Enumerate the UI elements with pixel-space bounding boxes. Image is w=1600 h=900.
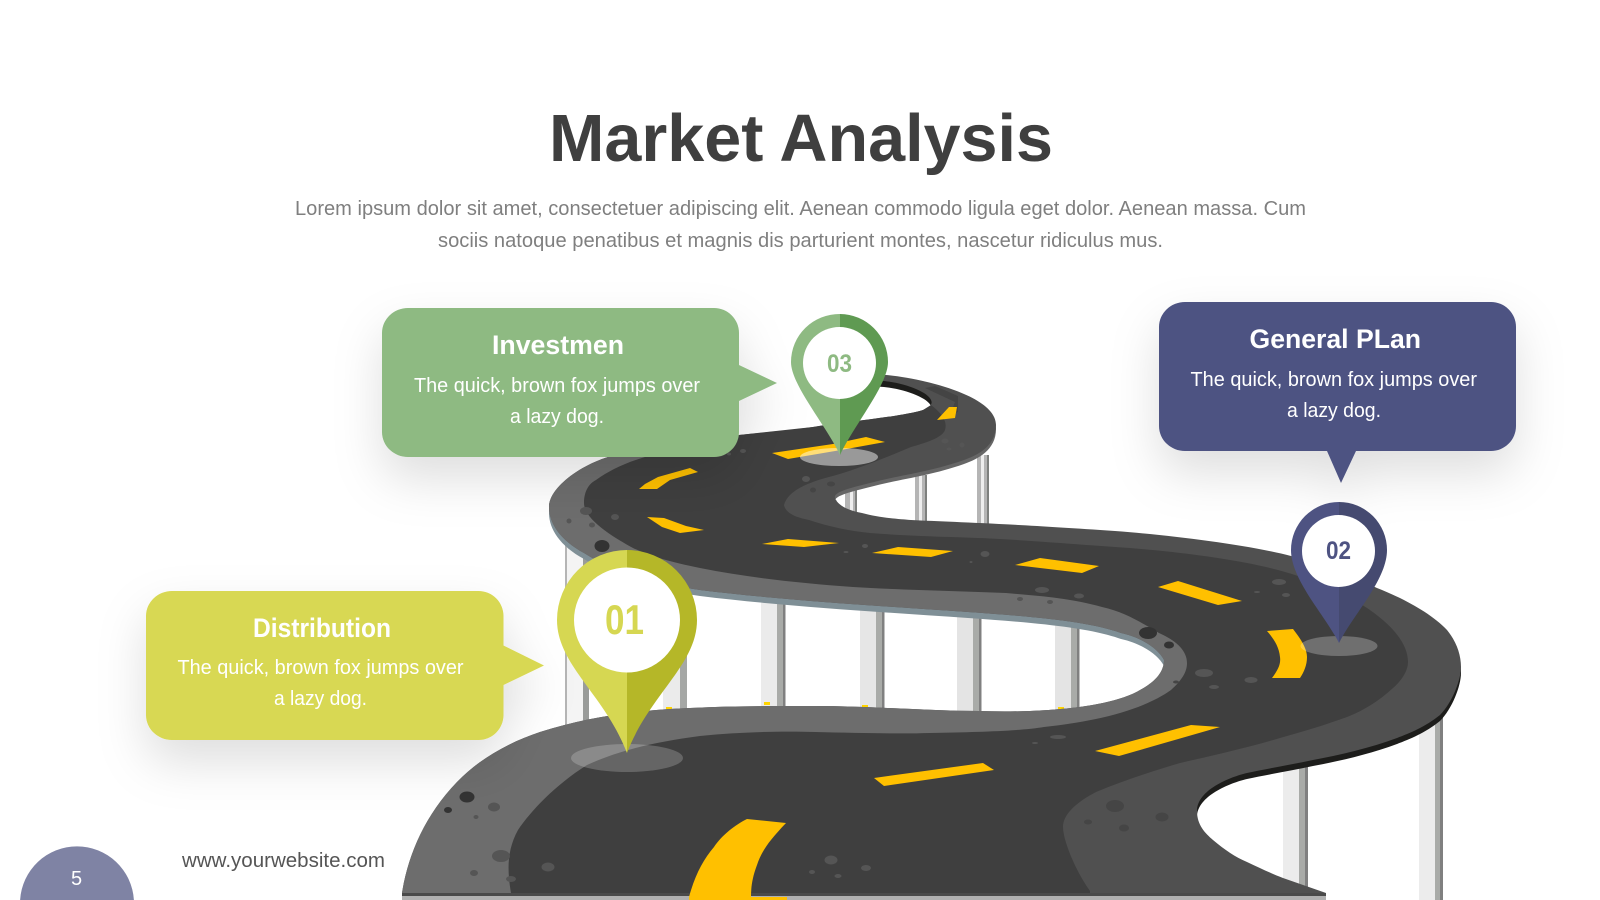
bottom road edge (402, 893, 1326, 896)
callout: distribution (146, 591, 544, 740)
map pin 02 (1291, 502, 1387, 656)
investment heading: Investmen (492, 330, 624, 360)
general plan text: a lazy dog. (1287, 400, 1381, 422)
general plan heading: General PLan (1250, 324, 1421, 354)
callout: investment (382, 308, 777, 457)
map pin 01: 01 (605, 596, 644, 643)
asphalt (509, 405, 1408, 893)
investment text: The quick, brown fox jumps over (414, 375, 700, 397)
general plan bubble (1159, 302, 1516, 483)
distribution heading: Distribution (253, 613, 391, 643)
distribution bubble (146, 591, 544, 740)
website url: www.yourwebsite.com (181, 850, 385, 872)
road side edges (549, 380, 1461, 814)
title: Market Analysis (549, 101, 1053, 176)
support pillars (565, 455, 1443, 900)
road illustration (402, 370, 1461, 900)
road surface (402, 370, 1461, 900)
callout: general plan (1159, 302, 1516, 483)
general plan text (1190, 369, 1477, 422)
investment text: a lazy dog. (510, 406, 604, 428)
map pin 01 (557, 550, 697, 772)
page number badge: 5 (71, 868, 82, 890)
subtitle text block: Lorem ipsum dolor sit amet, consectetuer adipiscing elit. Aenean commodo ligula eget dolor. Aenean massa. Cum (295, 198, 1306, 220)
yellow lane markings (639, 407, 1307, 897)
subtitle text block (295, 198, 1306, 252)
map pin 03 (791, 314, 888, 466)
distribution text (178, 657, 464, 710)
general plan text: The quick, brown fox jumps over (1190, 369, 1477, 391)
map pin 02: 02 (1326, 537, 1351, 565)
road rocks and potholes (444, 438, 1290, 882)
distribution text: The quick, brown fox jumps over (178, 657, 464, 679)
map pin 03: 03 (827, 350, 852, 378)
investment text (414, 375, 700, 428)
subtitle text block: sociis natoque penatibus et magnis dis parturient montes, nascetur ridiculus mus. (438, 230, 1163, 252)
page number badge (20, 846, 134, 900)
distribution text: a lazy dog. (274, 688, 367, 710)
investment bubble (382, 308, 777, 457)
